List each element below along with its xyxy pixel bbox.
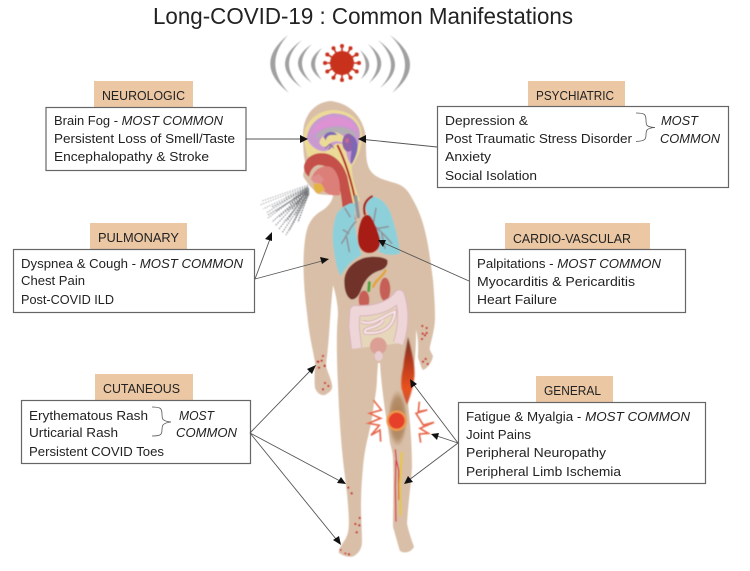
liver <box>344 257 388 299</box>
legs: knee, neuropathy, rash <box>317 360 434 555</box>
arrow: cutaneous to shin <box>250 433 346 484</box>
rash dots: hand, shin and foot <box>317 360 361 555</box>
inflamed knee <box>388 390 407 447</box>
panel: psychiatric <box>438 81 728 188</box>
pain burst right <box>416 402 434 443</box>
symptom list: psychiatric: MOST <box>661 113 699 128</box>
arrow: cardio-vascular to heart <box>378 240 469 281</box>
symptom list: general: Joint Pains <box>466 427 532 442</box>
symptom list: neurologic: Encephalopathy & Stroke <box>54 149 209 164</box>
kidneys <box>359 291 369 309</box>
symptom list: pulmonary: Post-COVID ILD <box>21 292 114 307</box>
symptom list: cardio-vascular: Heart Failure <box>477 292 557 307</box>
heading: cutaneous: CUTANEOUS <box>103 381 180 396</box>
exhaled droplet spray <box>260 185 309 235</box>
symptom list: psychiatric: Depression & <box>445 113 528 128</box>
symptom list: cutaneous: MOST <box>179 408 215 423</box>
symptom list: pulmonary <box>14 250 254 312</box>
arrow: general to thigh <box>410 379 458 443</box>
symptom list: psychiatric: Social Isolation <box>445 168 537 183</box>
arrow: neurologic to brain <box>246 135 308 143</box>
arrow: pulmonary to chest <box>255 257 329 279</box>
tissue layer <box>303 110 362 208</box>
heading: general <box>536 376 613 402</box>
symptom list: cutaneous: Urticarial Rash <box>29 425 118 440</box>
panel: pulmonary <box>14 223 254 312</box>
symptom list: neurologic: Persistent Loss of Smell/Taste <box>54 131 235 146</box>
symptom list: psychiatric <box>438 106 728 188</box>
panel: cutaneous <box>22 374 250 464</box>
heading: psychiatric: PSYCHIATRIC <box>536 88 614 103</box>
arrows from panels to body <box>246 135 469 545</box>
signal waves <box>270 35 410 93</box>
symptom list: cutaneous: Erythematous Rash <box>29 408 148 423</box>
symptom list: cardio-vascular <box>470 250 686 312</box>
heading: neurologic <box>94 81 193 107</box>
symptom list: pulmonary: Chest Pain <box>21 273 85 288</box>
heading: pulmonary <box>90 223 187 249</box>
symptom list: pulmonary: Dyspnea & Cough - MOST COMMON <box>21 256 244 271</box>
bronchi and trachea <box>342 197 392 252</box>
panel: cardio-vascular <box>470 223 686 312</box>
brain <box>307 113 360 165</box>
arrow: cutaneous to foot <box>250 433 341 545</box>
arrow: cutaneous to hand <box>250 365 316 433</box>
lungs <box>333 197 400 276</box>
symptom list: neurologic <box>46 108 246 170</box>
small intestine <box>362 312 395 333</box>
bladder <box>370 337 387 355</box>
head anatomy: brain and airway <box>303 110 362 220</box>
heading: neurologic: NEUROLOGIC <box>102 88 185 103</box>
panel: neurologic <box>46 81 246 170</box>
icon: virus with radiating signal waves <box>270 35 410 93</box>
heading: psychiatric <box>528 81 625 106</box>
peripheral limb vessels <box>395 449 399 522</box>
symptom list: cutaneous: Persistent COVID Toes <box>29 444 165 459</box>
abdominal fat <box>354 295 403 348</box>
heading: general: GENERAL <box>544 383 601 398</box>
symptom list: general <box>458 402 706 484</box>
panel: general <box>458 376 706 484</box>
heading: cutaneous <box>95 374 193 400</box>
body silhouette <box>303 101 435 557</box>
symptom list: general: Fatigue & Myalgia - MOST COMMON <box>466 409 691 424</box>
symptom list: psychiatric: COMMON <box>660 131 721 146</box>
symptom list: general: Peripheral Limb Ischemia <box>466 464 622 479</box>
heading: cardio-vascular <box>505 223 650 249</box>
virus <box>323 44 361 82</box>
organs <box>316 196 429 369</box>
heading: pulmonary: PULMONARY <box>98 230 179 245</box>
human body figure <box>260 101 435 557</box>
thigh myalgia <box>401 337 415 405</box>
symptom list: general: Peripheral Neuropathy <box>466 445 607 460</box>
symptom list: cutaneous <box>22 400 250 464</box>
colon <box>354 295 403 348</box>
pain burst left <box>368 400 381 442</box>
pancreas and gallbladder <box>373 271 385 287</box>
title: Long-COVID-19 : Common Manifestations <box>153 3 573 29</box>
rash dots on arms <box>316 325 429 369</box>
nasal cavity, throat and oesophagus <box>304 153 356 220</box>
symptom list: psychiatric: Anxiety <box>445 149 492 164</box>
symptom list: cardio-vascular: Palpitations - MOST COMMON <box>477 256 662 271</box>
symptom list: cardio-vascular: Myocarditis & Pericarditis <box>477 274 636 289</box>
heading: cardio-vascular: CARDIO-VASCULAR <box>513 231 631 246</box>
heart and aorta <box>364 196 373 215</box>
symptom list: neurologic: Brain Fog - MOST COMMON <box>54 113 224 128</box>
symptom list: cutaneous: COMMON <box>176 425 238 440</box>
arrow: general to knee <box>431 433 458 443</box>
symptom list: psychiatric: Post Traumatic Stress Disorder <box>445 131 633 146</box>
arrow: general to lower leg <box>404 443 458 484</box>
arrow: psychiatric to brain <box>358 135 437 147</box>
arrow: pulmonary to exhaled spray <box>255 232 272 279</box>
